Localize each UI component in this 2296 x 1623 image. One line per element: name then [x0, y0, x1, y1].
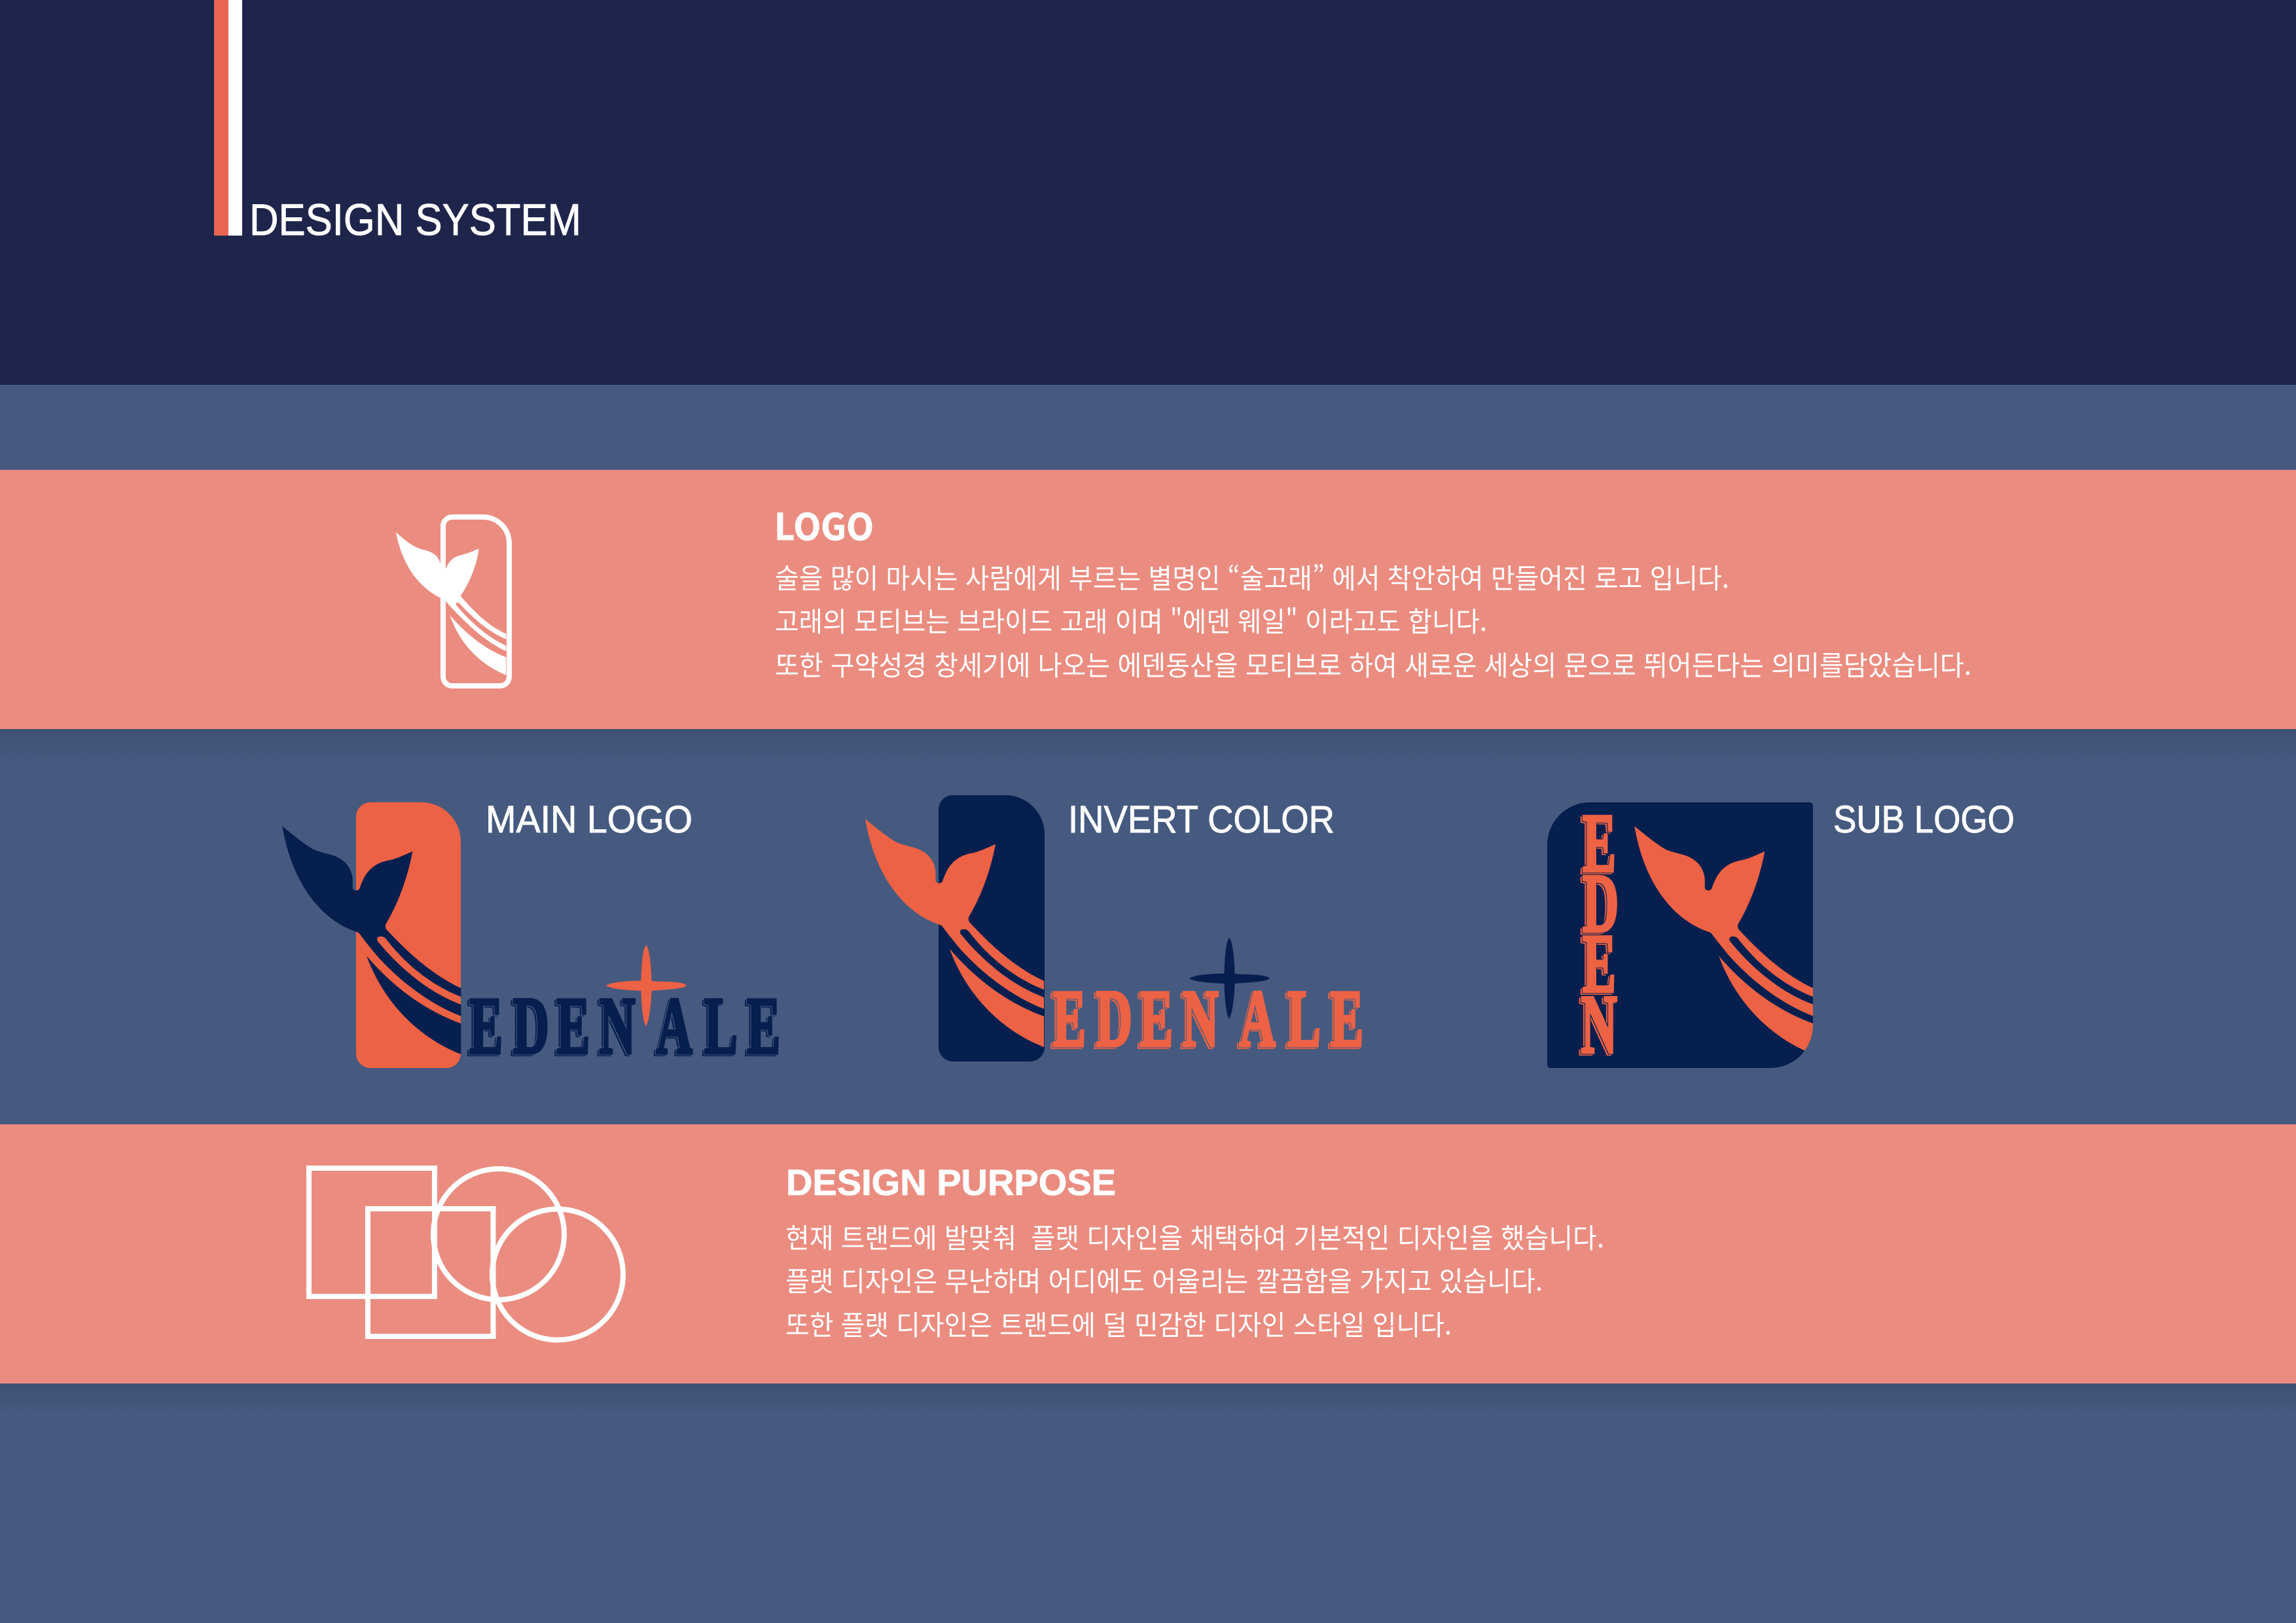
text block: design purpose description: 또한 플랫 디자인은 트랜드에 덜 민감한 디자인 스타일 입니다. — [785, 1304, 1452, 1344]
panel: main logo — [282, 798, 780, 1071]
icon: navy sparkle star — [1189, 938, 1270, 1019]
heading: design purpose: DESIGN PURPOSE — [786, 1162, 1116, 1203]
header band — [0, 0, 2296, 385]
text block: logo description — [775, 557, 1971, 684]
wordmark: EDEN ALE orange: EDENALE — [1052, 974, 1363, 1064]
heading: LOGO: LOGO — [774, 498, 874, 551]
icon: navy whale tail — [282, 826, 461, 1054]
label: sub logo: SUB LOGO — [1833, 798, 2015, 841]
title: DESIGN SYSTEM — [249, 195, 581, 245]
icon: orange whale tail — [865, 819, 1044, 1047]
text block: logo description: 고래의 모티브는 브라이드 고래 이며 "에덴 웨일" 이라고도 합니다. — [775, 600, 1487, 640]
icon: orange whale tail clipped — [1634, 826, 1813, 1054]
wordmark: vertical EDEN: EDEN — [1581, 797, 1619, 1071]
panel: sub logo — [1547, 797, 2015, 1071]
icon: white whale tail logo — [396, 517, 509, 686]
text block: logo description: 또한 구약성경 창세기에 나오는 에덴동산을 모티브로 하여 새로운 세상의 문으로 뛰어든다는 의미를담았습니다. — [775, 644, 1971, 684]
panel: invert color logo — [865, 795, 1363, 1064]
text block: logo description: 술을 많이 마시는 사람에게 부르는 별명인 “술고래” 에서 착안하여 만들어진 로고 입니다. — [775, 557, 1729, 597]
header accent stripes — [214, 0, 242, 236]
text block: design purpose description — [785, 1217, 1604, 1344]
label: invert color: INVERT COLOR — [1068, 798, 1335, 841]
icon: orange sparkle star — [606, 945, 687, 1026]
band shadow under purpose strip — [0, 1383, 2296, 1416]
logo plate: orange — [356, 802, 461, 1068]
text block: design purpose description: 플랫 디자인은 무난하며 어디에도 어울리는 깔끔함을 가지고 있습니다. — [785, 1260, 1543, 1300]
panel: logo description — [0, 470, 2296, 729]
wordmark: EDEN ALE navy: EDENALE — [469, 981, 780, 1071]
label: main logo: MAIN LOGO — [486, 798, 692, 841]
icon: overlapping squares and circles — [309, 1168, 623, 1340]
panel: design purpose — [0, 1124, 2296, 1383]
logo plate: navy — [939, 795, 1045, 1061]
band shadow under logo strip — [0, 729, 2296, 762]
text block: design purpose description: 현재 트랜드에 발맞춰 플랫 디자인을 채택하여 기본적인 디자인을 했습니다. — [785, 1217, 1604, 1257]
logo plate: navy square — [1547, 802, 1813, 1068]
